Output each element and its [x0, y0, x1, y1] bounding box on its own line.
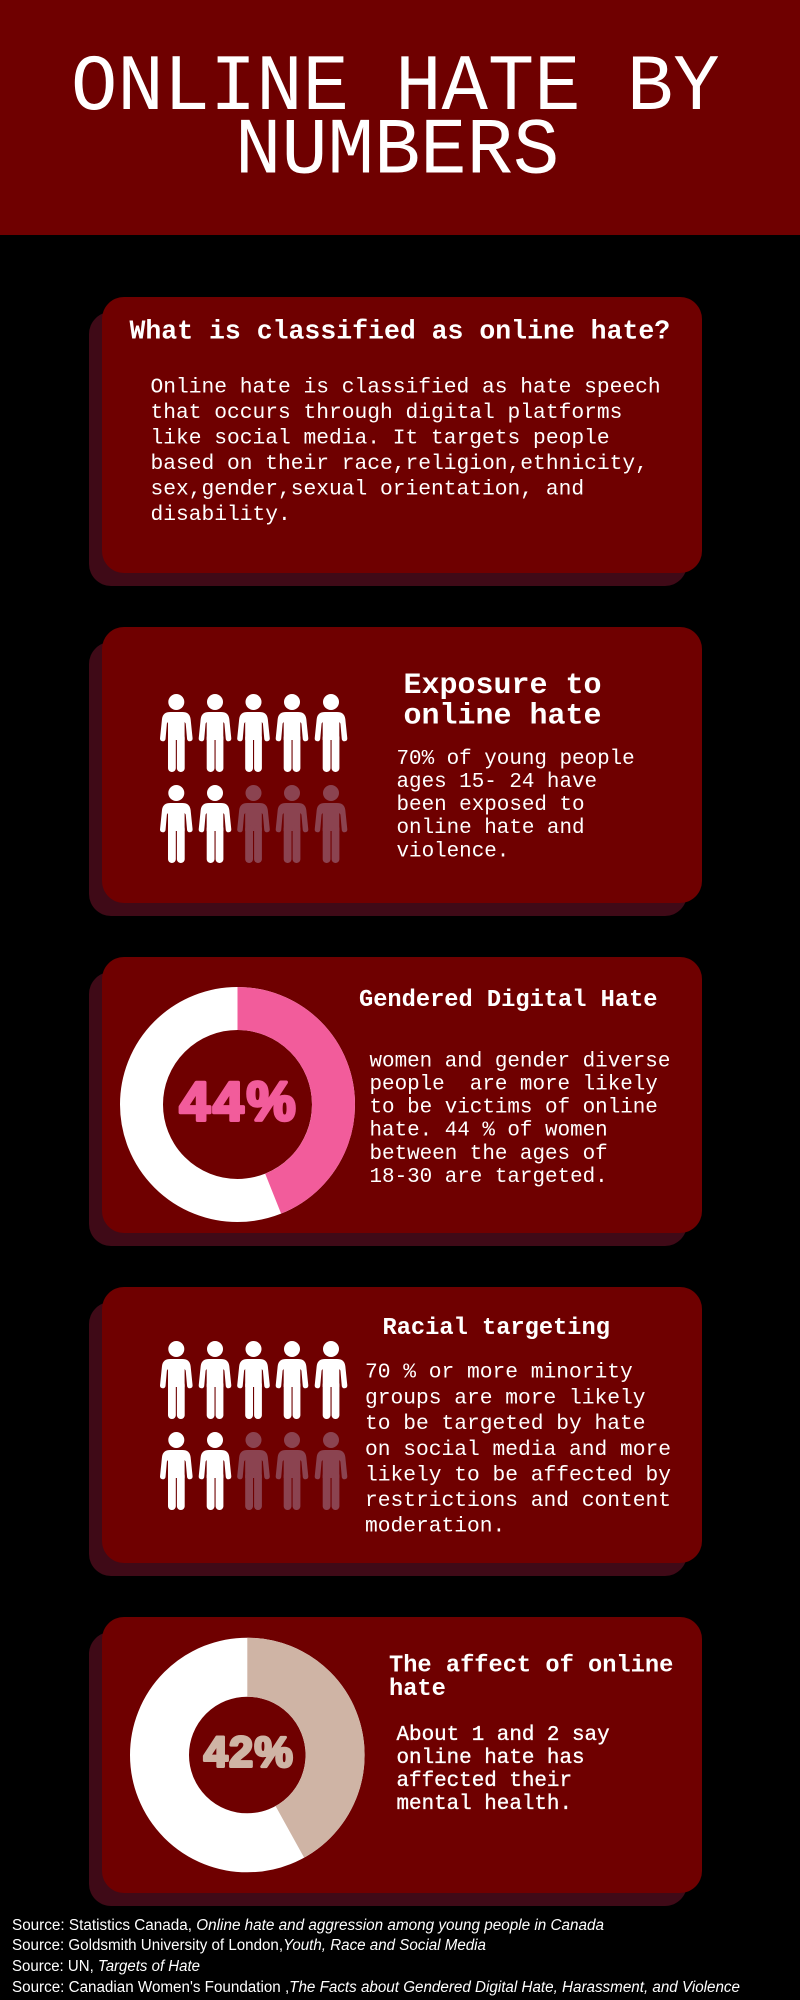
body text — [396, 748, 635, 864]
body text: 70% of young people — [396, 748, 635, 771]
heading: online hate — [404, 700, 602, 734]
body text: online hate and — [396, 817, 585, 840]
header banner — [0, 0, 800, 235]
title: ONLINE HATE BY — [71, 43, 720, 133]
donut chart 44% — [142, 1008, 334, 1200]
body text — [370, 1050, 670, 1189]
pictogram: 7 of 10 people — [160, 694, 347, 863]
body text: groups are more likely — [365, 1386, 646, 1410]
heading: hate — [389, 1676, 446, 1703]
body text — [150, 376, 661, 527]
heading: What is classified as online hate? — [130, 316, 670, 346]
donut chart 42% — [159, 1667, 335, 1843]
donut value: 42% — [204, 1728, 294, 1776]
heading: Exposure to — [404, 669, 602, 703]
body text: people are more likely — [370, 1074, 658, 1096]
heading: The affect of online — [389, 1652, 673, 1680]
body text: on social media and more — [365, 1438, 671, 1462]
title: NUMBERS — [235, 106, 559, 197]
body text: to be targeted by hate — [365, 1412, 646, 1436]
body text: disability. — [150, 503, 291, 527]
body text: women and gender diverse — [370, 1050, 670, 1074]
sources: Source: Goldsmith University of London,Youth, Race and Social Media — [12, 1937, 486, 1954]
body text: that occurs through digital platforms — [150, 401, 622, 425]
sources: Source: Canadian Women's Foundation ,The Facts about Gendered Digital Hate, Harassment, and Violence — [12, 1979, 740, 1996]
heading — [389, 1652, 673, 1703]
body text: affected their — [396, 1770, 572, 1793]
body text: like social media. It targets people — [150, 426, 610, 450]
body text: mental health. — [396, 1793, 572, 1816]
panel: the affect of online hate — [89, 1617, 702, 1906]
body text: restrictions and content — [365, 1489, 671, 1513]
body text: violence. — [396, 840, 509, 864]
body text: moderation. — [365, 1514, 505, 1538]
sources: Source: Statistics Canada, Online hate and aggression among young people in Canada — [12, 1917, 604, 1934]
panel: what is classified as online hate — [89, 297, 702, 586]
body text: ages 15- 24 have — [396, 771, 597, 794]
body text: based on their race,religion,ethnicity, — [150, 452, 648, 476]
panel: exposure to online hate — [89, 627, 702, 916]
donut value: 44% — [179, 1070, 299, 1132]
heading: Racial targeting — [382, 1315, 610, 1342]
body text: sex,gender,sexual orientation, and — [150, 478, 584, 502]
sources — [12, 1917, 740, 1996]
body text: likely to be affected by — [365, 1464, 671, 1488]
title — [71, 43, 720, 197]
heading: Gendered Digital Hate — [359, 987, 658, 1014]
body text: to be victims of online — [370, 1096, 658, 1120]
body text: between the ages of — [370, 1143, 608, 1166]
body text: 70 % or more minority — [365, 1360, 633, 1384]
body text — [365, 1360, 671, 1538]
body text: About 1 and 2 say — [396, 1724, 610, 1747]
body text — [396, 1724, 610, 1816]
panel: gendered digital hate — [89, 957, 702, 1246]
body text: Online hate is classified as hate speech — [150, 376, 661, 400]
body text: hate. 44 % of women — [370, 1120, 608, 1142]
sources: Source: UN, Targets of Hate — [12, 1958, 200, 1975]
pictogram: 7 of 10 people — [160, 1341, 347, 1510]
heading — [404, 669, 602, 734]
body text: 18-30 are targeted. — [370, 1166, 608, 1189]
panel: racial targeting — [89, 1287, 702, 1576]
body text: been exposed to — [396, 794, 585, 817]
body text: online hate has — [396, 1747, 585, 1770]
